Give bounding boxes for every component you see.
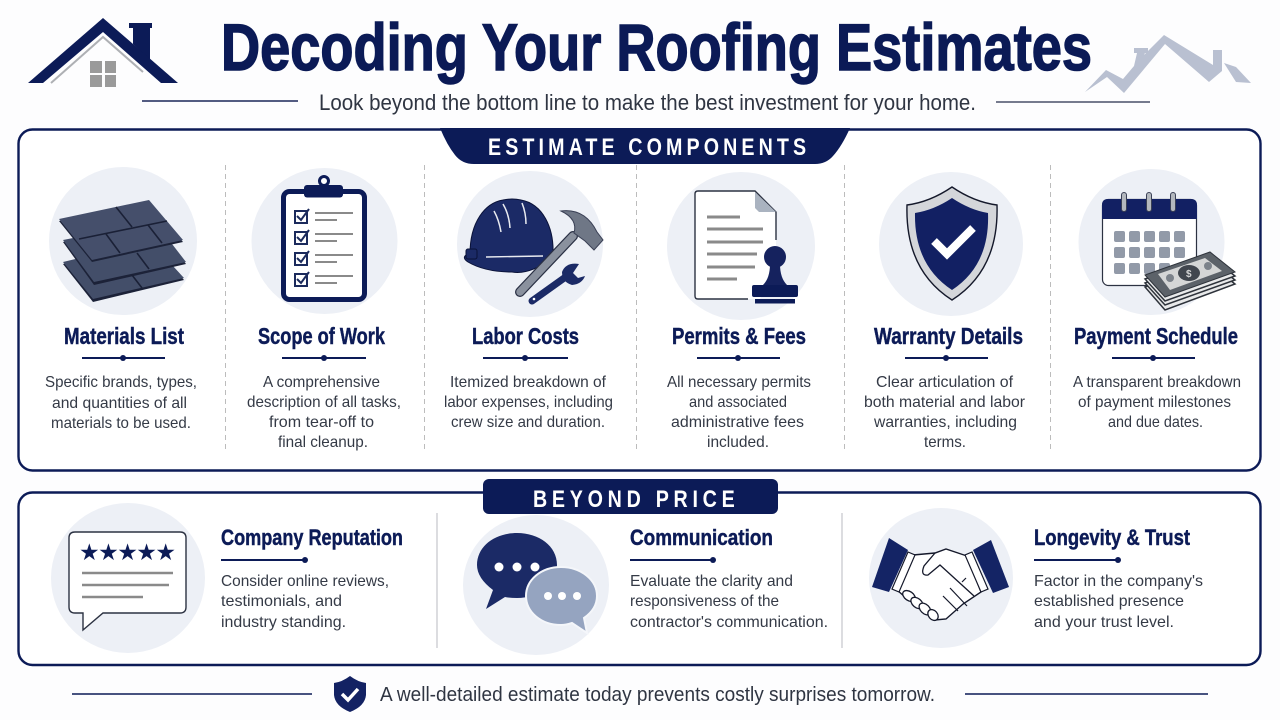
- description: [1034, 573, 1203, 631]
- description: both material and labor: [864, 394, 1026, 411]
- description: [630, 573, 828, 631]
- description: of payment milestones: [1078, 394, 1231, 411]
- panel: estimate components: [18, 128, 1260, 470]
- description: Factor in the company's: [1034, 573, 1203, 590]
- icon: calendar and cash: [1078, 169, 1235, 315]
- icon: review bubble with stars: [51, 503, 205, 653]
- icon: speech bubbles: [463, 515, 609, 655]
- item: company reputation: [51, 503, 403, 653]
- description: Specific brands, types,: [45, 374, 197, 391]
- description: and due dates.: [1108, 414, 1203, 431]
- column: payment schedule: [1073, 169, 1241, 431]
- description: and quantities of all: [52, 395, 187, 412]
- section tab: estimate components: ESTIMATE COMPONENTS: [488, 133, 806, 160]
- description: materials to be used.: [51, 415, 191, 432]
- description: industry standing.: [221, 614, 346, 631]
- heading rule: [905, 355, 988, 361]
- icon: clipboard checklist: [252, 168, 398, 314]
- subtitle rule right: [996, 101, 1150, 103]
- header logo: faded rooflines: [1085, 35, 1251, 93]
- description: responsiveness of the: [630, 593, 779, 610]
- icon: roof shingles: [49, 167, 197, 315]
- title: Decoding Your Roofing Estimates: [221, 10, 1092, 84]
- heading rule: [483, 355, 568, 361]
- description: warranties, including: [873, 414, 1017, 431]
- description: from tear-off to: [269, 414, 374, 431]
- item: communication: [463, 515, 828, 655]
- heading: communication: Communication: [630, 525, 773, 550]
- column: warranty details: [864, 172, 1026, 451]
- heading: scope of work: Scope of Work: [258, 323, 385, 349]
- description: A comprehensive: [263, 374, 380, 391]
- subtitle: Look beyond the bottom line to make the best investment for your home.: [319, 90, 976, 115]
- description: and your trust level.: [1034, 614, 1174, 631]
- heading rule: [697, 355, 780, 361]
- heading rule: [282, 355, 366, 361]
- description: contractor's communication.: [630, 614, 828, 631]
- heading: permits and fees: Permits & Fees: [672, 323, 806, 349]
- heading rule: [1034, 557, 1121, 563]
- description: [1073, 374, 1241, 431]
- heading: materials list: Materials List: [64, 323, 184, 349]
- icon: review bubble with stars: ★★★★★: [79, 539, 176, 565]
- description: and associated: [689, 394, 787, 411]
- description: [45, 374, 197, 432]
- description: testimonials, and: [221, 593, 342, 610]
- description: administrative fees: [671, 414, 804, 431]
- heading rule: [630, 557, 716, 563]
- heading: company reputation: Company Reputation: [221, 525, 403, 550]
- column: materials list: [45, 167, 197, 432]
- description: Clear articulation of: [876, 374, 1014, 391]
- description: description of all tasks,: [247, 394, 401, 411]
- description: All necessary permits: [667, 374, 811, 391]
- description: Evaluate the clarity and: [630, 573, 793, 590]
- subtitle rule left: [142, 100, 298, 102]
- column: labor costs: [444, 171, 613, 431]
- footer rule right: [965, 693, 1208, 695]
- description: established presence: [1034, 593, 1184, 610]
- panel: beyond price: [18, 479, 1260, 665]
- footer takeaway: A well-detailed estimate today prevents costly surprises tomorrow.: [380, 684, 935, 706]
- icon: calendar and cash: $: [1186, 269, 1192, 280]
- heading: longevity and trust: Longevity & Trust: [1034, 525, 1191, 550]
- description: [667, 374, 811, 451]
- description: Itemized breakdown of: [450, 374, 607, 391]
- description: Consider online reviews,: [221, 573, 389, 590]
- description: final cleanup.: [278, 434, 368, 451]
- column: scope of work: [247, 168, 401, 451]
- description: [221, 573, 389, 631]
- heading: payment schedule: Payment Schedule: [1074, 323, 1238, 349]
- description: [247, 374, 401, 451]
- section tab: estimate components: [440, 128, 850, 164]
- section tab: beyond price: [483, 479, 778, 514]
- icon: hard hat and tools: [457, 171, 603, 317]
- icon: shield with check: [879, 172, 1023, 316]
- icon: handshake: [869, 508, 1013, 648]
- section tab: beyond price: BEYOND PRICE: [533, 485, 735, 512]
- description: [444, 374, 613, 431]
- heading rule: [1112, 355, 1195, 361]
- header logo: house: [28, 18, 178, 87]
- heading: warranty details: Warranty Details: [874, 323, 1023, 349]
- heading rule: [82, 355, 165, 361]
- heading rule: [221, 557, 308, 563]
- description: included.: [707, 434, 769, 451]
- description: crew size and duration.: [451, 414, 605, 431]
- description: terms.: [924, 434, 966, 451]
- heading: labor costs: Labor Costs: [472, 323, 579, 349]
- icon: document and stamp: [667, 172, 815, 320]
- description: labor expenses, including: [444, 394, 613, 411]
- icon: footer shield: [334, 676, 366, 712]
- description: [864, 374, 1026, 451]
- column: permits and fees: [667, 172, 815, 451]
- description: A transparent breakdown: [1073, 374, 1241, 391]
- footer rule left: [72, 693, 312, 695]
- item: longevity and trust: [869, 508, 1203, 648]
